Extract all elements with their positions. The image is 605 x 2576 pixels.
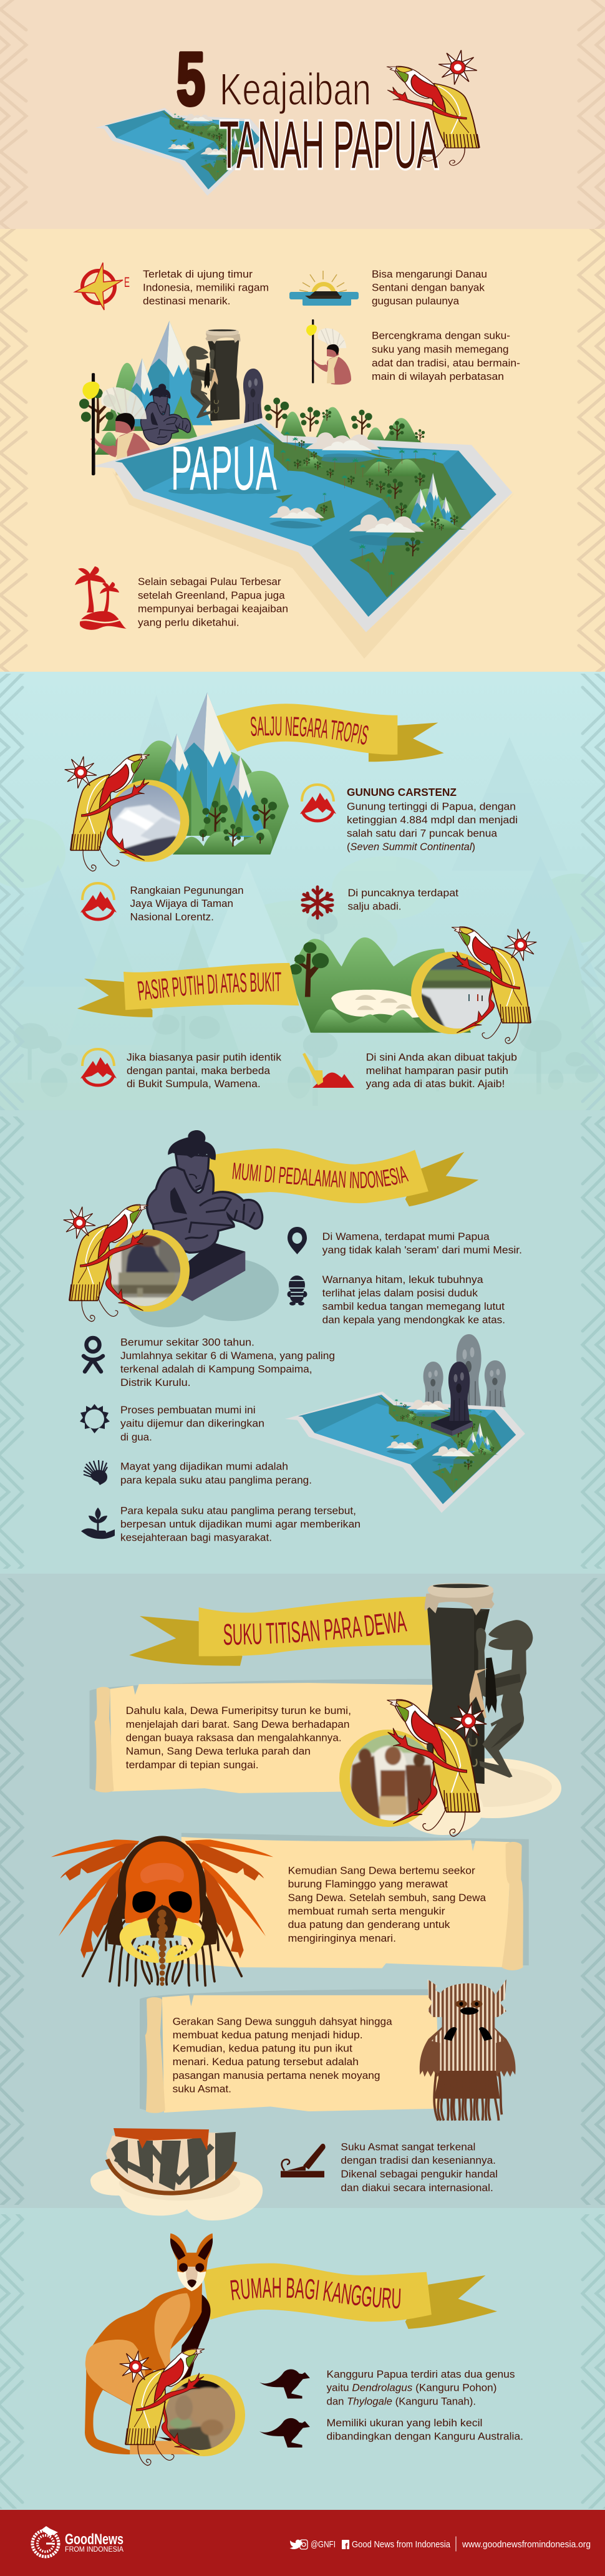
text: asmat: dengan tradisi dan keseniannya.: [341, 2154, 496, 2166]
icon: mountain badge: [300, 785, 336, 821]
title mini map: [95, 108, 268, 196]
text: amazing: Di sini Anda akan dibuat takjub: [366, 1052, 517, 1063]
map shadow: [112, 471, 515, 659]
text: story 1: [126, 1705, 351, 1771]
text: gunung carstenz: [347, 786, 518, 853]
text: story 3: suku Asmat.: [173, 2083, 231, 2094]
statue shadow: [128, 1259, 279, 1327]
text: message: berpesan untuk dijadikan mumi agar memberikan: [120, 1518, 361, 1530]
icon: kangaroo: [259, 2369, 310, 2399]
bird with branch: [452, 926, 540, 1043]
text: jaya wijaya: Rangkaian Pegunungan: [130, 884, 243, 896]
text: story 1: terdampar di tepian sungai.: [126, 1759, 259, 1771]
text: story 2: Sang Dewa. Setelah sembuh, sang Dewa: [288, 1892, 486, 1904]
icon: mummy: [287, 1276, 307, 1305]
text: story 3: menari. Kedua patung tersebut adalah: [173, 2056, 359, 2068]
map label: PAPUA: [171, 433, 277, 503]
text: process: yaitu dijemur dan dikeringkan: [120, 1417, 264, 1430]
section 4 background: [0, 1574, 605, 2208]
statue: seated mummy small: [141, 384, 191, 445]
mini map with statues: [285, 1334, 525, 1513]
text: story 3: Gerakan Sang Dewa sungguh dahsyat hingga: [173, 2016, 392, 2027]
text: tribes: adat dan tradisi, atau bermain-: [372, 357, 520, 369]
banner: suku titisan: [130, 1597, 430, 1666]
scroll 2: [182, 1833, 529, 1970]
section 3 background: [0, 1110, 605, 1574]
text: gunung carstenz: GUNUNG CARSTENZ: [347, 786, 457, 798]
text: story 2: burung Flaminggo yang merawat: [288, 1878, 448, 1890]
title: 5: 5: [177, 37, 205, 121]
footer: FROM INDONESIA: [65, 2546, 123, 2554]
footer: @GNFI: [311, 2540, 336, 2550]
spear foreground: [92, 448, 95, 475]
icon: kangaroo: [259, 2418, 310, 2448]
text: process: di gua.: [120, 1431, 152, 1443]
text: lake sentani: [372, 268, 487, 307]
text: age: Berumur sekitar 300 tahun.: [120, 1336, 254, 1349]
text: lake sentani: Bisa mengarungi Danau: [372, 268, 487, 280]
banner: mumi: MUMI DI PEDALAMAN INDONESIA: [232, 1163, 409, 1188]
cream blob under drum: [402, 1758, 561, 1835]
footer: GoodNews: [65, 2531, 123, 2548]
icon: hand with plant: [81, 1508, 115, 1539]
big map of Papua: [92, 418, 513, 632]
bird with branch: [387, 1700, 480, 1836]
photo: white sand: [411, 952, 499, 1034]
hill scene with sand: [289, 937, 471, 1033]
icon: tribal man: [306, 319, 351, 385]
text: largest island: setelah Greenland, Papua juga: [138, 589, 285, 601]
text: location: destinasi menarik.: [143, 295, 231, 307]
scroll 1: [90, 1679, 436, 1793]
icon: compass: E: [124, 274, 130, 290]
icon: map pin: [288, 1227, 307, 1254]
text: asmat: [341, 2141, 498, 2194]
text: gunung carstenz: Gunung tertinggi di Papua, dengan: [347, 801, 516, 812]
text: appearance: Warnanya hitam, lekuk tubuhnya: [322, 1274, 483, 1286]
icon: lake sunrise: [289, 271, 359, 306]
text: message: Para kepala suku atau panglima perang tersebut,: [120, 1504, 356, 1517]
text: genus: yaitu Dendrolagus (Kanguru Pohon): [327, 2381, 496, 2394]
text: age: [120, 1336, 335, 1388]
text: largest island: [138, 576, 288, 629]
text: wamena: Di Wamena, terdapat mumi Papua: [322, 1231, 490, 1242]
text: story 1: Namun, Sang Dewa terluka parah dan: [126, 1745, 311, 1757]
text: amazing: yang ada di atas bukit. Ajaib!: [366, 1078, 505, 1090]
banner: rumah kangguru: [204, 2263, 497, 2329]
banner: pasir putih: [77, 963, 299, 1017]
section 2 background: [0, 672, 605, 1111]
photo: kangaroo: [162, 2374, 245, 2456]
text: process: [120, 1404, 264, 1443]
text: chiefs: [120, 1461, 312, 1486]
icon: mountain badge: [80, 1049, 117, 1085]
map label: [168, 433, 281, 503]
text: amazing: [366, 1052, 517, 1090]
text: tribes: main di wilayah perbatasan: [372, 370, 504, 382]
text: asmat: Dikenal sebagai pengukir handal: [341, 2168, 498, 2180]
text: largest island: mempunyai berbagai keajaiban: [138, 603, 288, 615]
text: age: Distrik Kurulu.: [120, 1377, 191, 1388]
photo: tribesmen: [339, 1730, 437, 1827]
text: message: kesejahteraan bagi masyarakat.: [120, 1532, 272, 1543]
photo: mountain: [106, 780, 189, 862]
text: amazing: melihat hamparan pasir putih: [366, 1065, 508, 1077]
text: asmat: dan diakui secara internasional.: [341, 2182, 493, 2194]
banner: salju negara tropis: SALJU NEGARA TROPIS: [251, 716, 369, 745]
title sun: [435, 47, 480, 88]
mountain scene: [131, 692, 289, 855]
text: location: Terletak di ujung timur: [143, 268, 253, 280]
text: lake sentani: gugusan pulaunya: [372, 295, 460, 307]
text: story 2: [288, 1865, 486, 1944]
side pattern left: [0, 0, 29, 2509]
icon: person: [84, 1338, 103, 1372]
side pattern right: [576, 0, 605, 2509]
footer: [0, 2510, 605, 2576]
text: age: terkenal adalah di Kampung Sompaima,: [120, 1363, 312, 1375]
header background: [0, 0, 605, 229]
section 1 background: [0, 229, 605, 672]
scroll 3: [140, 1989, 440, 2113]
banner: suku titisan: SUKU TITISAN PARA DEWA: [223, 1611, 407, 1645]
text: eternal snow: Di puncaknya terdapat: [348, 887, 458, 899]
footer: Good News from Indonesia: [352, 2540, 451, 2550]
title: Keajaiban: Keajaiban: [220, 65, 371, 115]
text: story 3: pasangan manusia pertama nenek moyang: [173, 2070, 380, 2081]
bird with branch: [117, 2348, 205, 2466]
text: story 2: mengiringinya menari.: [288, 1932, 396, 1944]
bird with branch: [62, 753, 150, 871]
text: appearance: dan kepala yang mendongkak ke atas.: [322, 1314, 505, 1326]
statue: seated mummy: [147, 1130, 263, 1301]
text: eternal snow: salju abadi.: [348, 901, 402, 912]
text: white sand: dengan pantai, maka berbeda: [127, 1065, 271, 1077]
text: size: Memiliki ukuran yang lebih kecil: [327, 2417, 483, 2429]
text: wamena: [322, 1231, 522, 1256]
footer: www.goodnewsfromindonesia.org: [462, 2540, 591, 2550]
icon: compass: [75, 263, 130, 310]
text: white sand: Jika biasanya pasir putih identik: [127, 1052, 282, 1063]
text: appearance: terlihat jelas dalam posisi duduk: [322, 1287, 478, 1299]
title bird of paradise: [387, 66, 480, 165]
text: wamena: yang tidak kalah 'seram' dari mumi Mesir.: [322, 1244, 522, 1256]
text: gunung carstenz: (Seven Summit Continental): [347, 841, 475, 853]
text: white sand: di Bukit Sumpula, Wamena.: [127, 1078, 261, 1090]
logo: [32, 2526, 59, 2557]
icon: chisel: [281, 2144, 326, 2177]
icon: facebook: [342, 2540, 349, 2551]
text: lake sentani: Sentani dengan banyak: [372, 282, 485, 293]
section 5 background: [0, 2208, 605, 2510]
text: white sand: [127, 1052, 282, 1090]
text: story 3: Kemudian, kedua patung itu pun ikut: [173, 2042, 352, 2055]
text: process: Proses pembuatan mumi ini: [120, 1404, 256, 1416]
icon: echidna: [84, 1460, 107, 1485]
text: size: dibandingkan dengan Kanguru Australia.: [327, 2430, 523, 2443]
text: message: [120, 1504, 361, 1543]
text: story 3: membuat kedua patung menjadi hidup.: [173, 2029, 363, 2041]
kangaroo: [85, 2234, 213, 2454]
text: location: [143, 268, 269, 307]
sun ornament: [447, 1700, 490, 1742]
text: tribes: suku yang masih memegang: [372, 343, 509, 356]
icon: palm island: [75, 566, 127, 630]
ceremonial mask: [51, 1836, 273, 1986]
text: story 2: dua patung dan genderang untuk: [288, 1919, 450, 1930]
text: story 2: membuat rumah serta mengukir: [288, 1905, 445, 1917]
text: gunung carstenz: ketinggian 4.884 mdpl dan menjadi: [347, 814, 518, 826]
text: location: Indonesia, memiliki ragam: [143, 282, 269, 293]
text: eternal snow: [348, 887, 458, 912]
text: gunung carstenz: salah satu dari 7 puncak benua: [347, 827, 498, 840]
text: story 1: dengan buaya raksasa dan mengalahkannya.: [126, 1731, 342, 1744]
icon: twitter: [289, 2540, 302, 2549]
drum and carved figure: [425, 1583, 533, 1784]
text: appearance: sambil kedua tangan memegang lutut: [322, 1300, 505, 1312]
banner: mumi: [209, 1148, 479, 1206]
text: chiefs: para kepala suku atau panglima perang.: [120, 1474, 312, 1486]
text: jaya wijaya: Nasional Lorentz.: [130, 911, 214, 923]
text: story 1: menjelajah dari barat. Sang Dewa berhadapan: [126, 1718, 350, 1730]
text: age: Jumlahnya sekitar 6 di Wamena, yang paling: [120, 1350, 335, 1362]
text: story 3: [173, 2016, 392, 2094]
text: asmat: Suku Asmat sangat terkenal: [341, 2141, 475, 2153]
banner: pasir putih: PASIR PUTIH DI ATAS BUKIT: [137, 972, 281, 1000]
bird with branch: [60, 1204, 148, 1322]
text: largest island: Selain sebagai Pulau Terbesar: [138, 576, 281, 588]
text: jaya wijaya: Jaya Wijaya di Taman: [130, 898, 233, 909]
text: tribes: Bercengkrama dengan suku-: [372, 329, 510, 342]
statue: ancestor small: [243, 369, 263, 423]
icon: facebook: f: [345, 2541, 348, 2551]
text: genus: dan Thylogale (Kanguru Tanah).: [327, 2395, 476, 2408]
text: appearance: [322, 1274, 505, 1326]
icon: shovel and sand: [302, 1053, 354, 1088]
photo: mummy: [106, 1229, 190, 1312]
text: story 1: Dahulu kala, Dewa Fumeripitsy turun ke bumi,: [126, 1705, 351, 1717]
text: chiefs: Mayat yang dijadikan mumi adalah: [120, 1461, 288, 1472]
text: tribes: [372, 329, 520, 382]
text: largest island: yang perlu diketahui.: [138, 616, 240, 629]
icon: instagram: [300, 2540, 307, 2549]
icon: sun: [80, 1404, 110, 1433]
text: size: [327, 2417, 523, 2443]
banner: salju negara tropis: [217, 704, 444, 762]
carved bowl on cream base: [90, 2128, 263, 2220]
drum and carved figure small: [186, 329, 241, 421]
costume figure: [420, 1979, 516, 2121]
text: genus: [327, 2368, 515, 2408]
text: jaya wijaya: [130, 884, 243, 923]
banner: rumah kangguru: RUMAH BAGI KANGGURU: [230, 2278, 400, 2309]
scene behind the map: [79, 321, 425, 478]
icon: snowflake: [302, 887, 332, 918]
text: story 2: Kemudian Sang Dewa bertemu seekor: [288, 1865, 475, 1876]
text: genus: Kangguru Papua terdiri atas dua genus: [327, 2368, 515, 2380]
icon: mountain badge: [80, 883, 117, 919]
